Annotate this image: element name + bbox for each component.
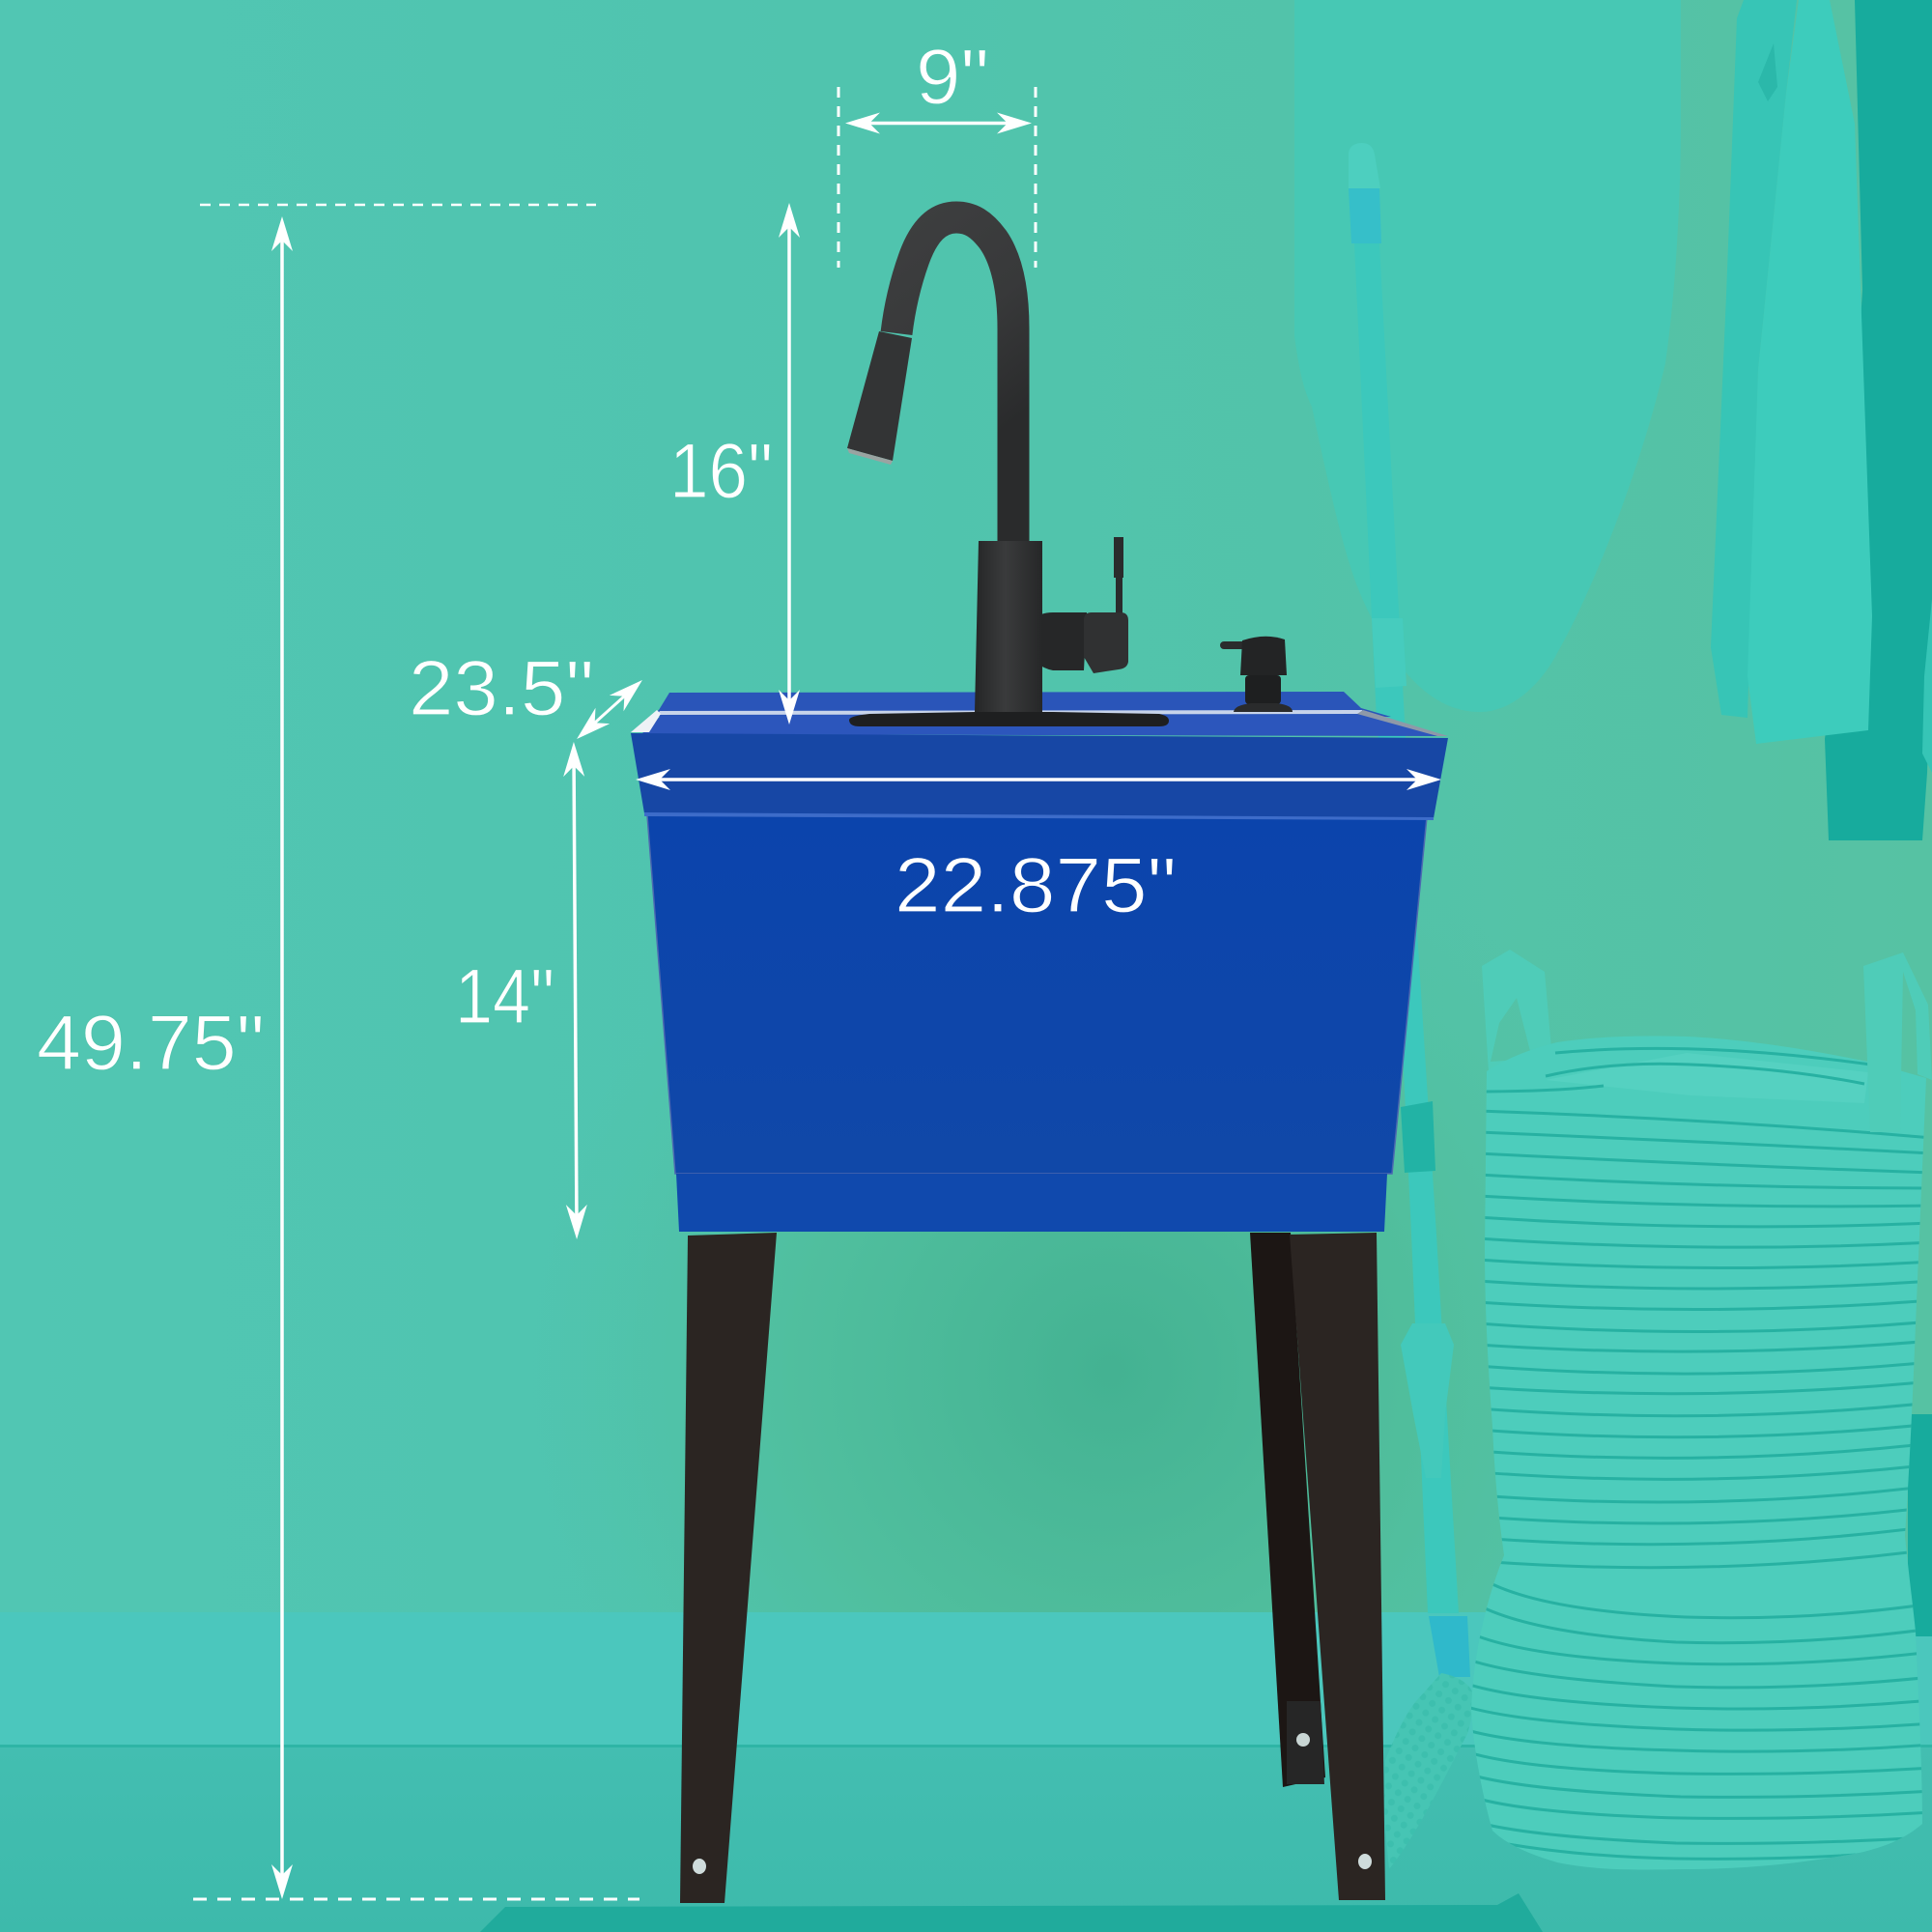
mop head connector [1429, 1616, 1470, 1677]
dimension: faucet reach 9 [838, 34, 1036, 268]
ironing board [1294, 0, 1681, 712]
dimension: tub height 14 [455, 753, 577, 1228]
hamper right handle [1863, 952, 1932, 1132]
mop handle band [1349, 188, 1381, 243]
tub rim [631, 733, 1448, 818]
tub inner basin [641, 715, 1439, 736]
tub base band [676, 1174, 1387, 1232]
hamper body [1471, 1037, 1926, 1869]
dimension: faucet height 16: 16" [669, 428, 773, 515]
background: rug [480, 1893, 1543, 1932]
shirt collar shadow [1758, 43, 1777, 101]
faucet gooseneck spout [896, 217, 1013, 541]
dimension: depth 23.5: 23.5" [409, 645, 594, 732]
light hanging shirt [1747, 0, 1872, 744]
dark hanging shirt [1825, 0, 1932, 840]
dimension: faucet reach 9: 9" [916, 34, 989, 121]
tub back white line [657, 710, 1364, 715]
left shirt sleeve [1711, 0, 1797, 718]
tub left white corner [631, 710, 661, 732]
mop collar upper [1372, 618, 1406, 688]
hamper inner rim [1546, 1053, 1868, 1103]
mop [1349, 143, 1473, 1869]
right front leg [1290, 1233, 1385, 1900]
dimension: width 22.875: 22.875" [895, 842, 1177, 929]
faucet [847, 217, 1169, 726]
dimension: tub height 14: 14" [455, 953, 554, 1040]
mop collar lower [1401, 1101, 1435, 1173]
faucet spray head [847, 331, 912, 465]
mop handle [1354, 243, 1459, 1613]
tub body [647, 815, 1427, 1174]
sink tub [631, 692, 1448, 1232]
tub right grey corner [1357, 710, 1448, 736]
tub back ledge [649, 692, 1391, 717]
sliver of light fabric at right edge [1922, 599, 1932, 773]
sink legs [680, 1233, 1385, 1903]
faucet valve cap [1084, 612, 1128, 673]
mop chenille head [1384, 1673, 1473, 1869]
faucet valve housing [1030, 612, 1087, 670]
left leg [680, 1233, 777, 1903]
right back leg [1250, 1233, 1325, 1787]
leg bracket [1287, 1701, 1324, 1784]
faucet deck plate [849, 712, 1169, 726]
box behind hamper [1908, 1414, 1932, 1636]
faucet lever handle [1114, 537, 1123, 614]
laundry hamper [1463, 950, 1932, 1869]
hamper stripes [1463, 1048, 1932, 1859]
hamper left handle [1482, 950, 1555, 1072]
background: floor [0, 1745, 1932, 1932]
mop cone [1401, 1323, 1454, 1478]
mop handle cap [1349, 143, 1380, 188]
soap dispenser [1220, 637, 1293, 712]
faucet body [975, 541, 1042, 712]
background: skirting band [0, 1612, 1932, 1747]
dimension: overall height 49.75: 49.75" [37, 1000, 265, 1087]
